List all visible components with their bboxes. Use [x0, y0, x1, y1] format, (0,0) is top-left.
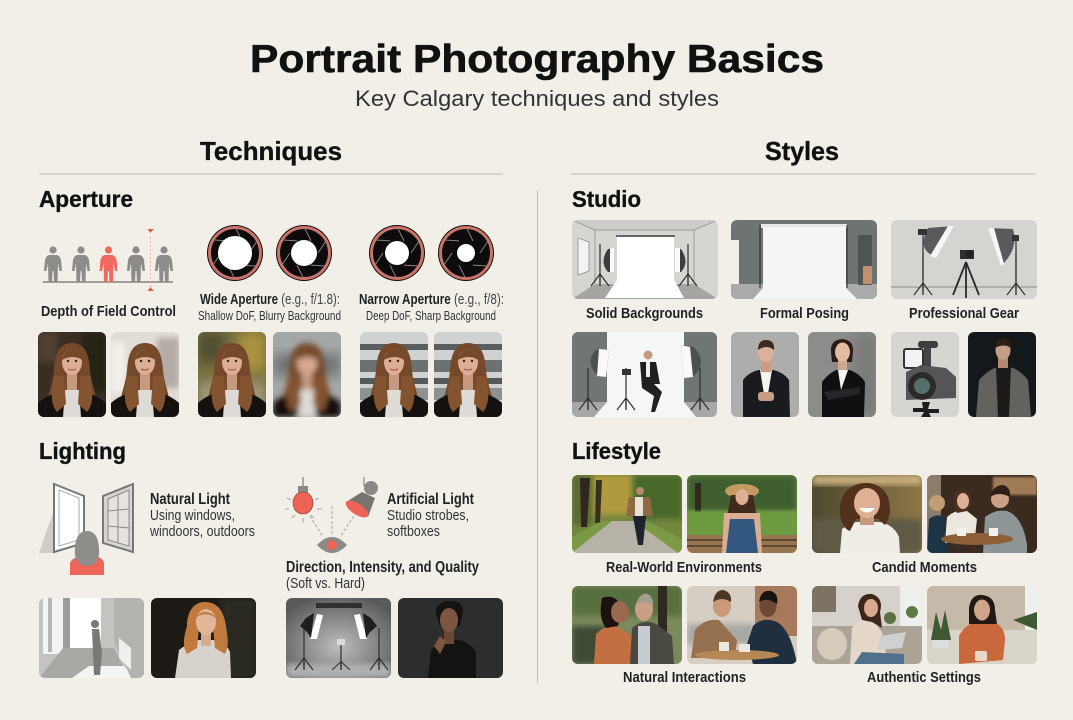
heading: lifestyle: Lifestyle — [572, 438, 661, 464]
photo: woman with laptop on sofa — [812, 586, 922, 664]
title: Portrait Photography Basics — [250, 38, 824, 81]
panel: studio — [572, 186, 1038, 417]
photo: candid smiling woman — [812, 475, 922, 553]
photo: woman on couch with mug — [927, 586, 1037, 664]
photo: two men at cafe — [687, 586, 797, 664]
label: narrow aperture: Narrow Aperture (e.g., f/8): — [359, 292, 504, 308]
photo: couple in park — [572, 586, 682, 664]
illustration: solid backgrounds — [572, 220, 718, 299]
photo: narrow aperture building background 2 — [434, 332, 502, 417]
photo: portrait dark background — [38, 332, 106, 417]
icon: bulb, lamp and eye — [285, 477, 378, 553]
heading: aperture: Aperture — [39, 186, 133, 212]
photo: businessman — [731, 332, 801, 417]
photo: narrow aperture building background 1 — [360, 332, 428, 417]
label: direction, intensity and quality: Direction, Intensity, and Quality — [286, 559, 479, 576]
icon: wide aperture 1 — [207, 225, 263, 281]
photo: portrait light background — [111, 332, 179, 417]
label: professional gear: Professional Gear — [909, 305, 1019, 322]
photo: walking in park — [572, 475, 682, 553]
label: wide aperture: Wide Aperture (e.g., f/1.8): — [200, 292, 340, 308]
label: artificial light: Artificial Light — [387, 491, 474, 508]
photo: wide aperture sharp subject — [198, 332, 266, 417]
icon: narrow aperture 1 — [369, 225, 425, 281]
icon: depth of field figures — [43, 229, 173, 291]
icon: window with person — [39, 484, 133, 575]
label: candid moments: Candid Moments — [872, 559, 977, 576]
icon: wide aperture 2 — [276, 225, 332, 281]
label: natural interactions: Natural Interactions — [623, 669, 746, 686]
text: natural light description: windoors, outdoors — [149, 524, 255, 540]
label: natural light: Natural Light — [150, 491, 230, 508]
label: authentic settings: Authentic Settings — [867, 669, 981, 686]
photo: woman on bench with hat — [687, 475, 797, 553]
text: artificial light description: Studio strobes, — [387, 508, 469, 524]
photo: wide aperture blurred subject — [273, 332, 341, 417]
photo: woman with auburn hair, dark — [151, 598, 256, 678]
heading: studio: Studio — [572, 186, 641, 212]
label: depth of field control: Depth of Field Control — [41, 303, 176, 320]
column heading: styles: Styles — [765, 136, 839, 166]
label: real-world environments: Real-World Environments — [606, 559, 762, 576]
text: natural light description — [149, 508, 255, 540]
photo: friends in cafe — [927, 475, 1037, 553]
illustration: professional gear — [891, 220, 1037, 299]
illustration: camera with light — [891, 332, 961, 417]
panel: lighting — [39, 438, 503, 678]
illustration: seated subject in studio — [572, 332, 717, 417]
text: artificial light description: softboxes — [387, 524, 440, 540]
text: soft vs hard: (Soft vs. Hard) — [286, 576, 365, 592]
text: artificial light description — [387, 508, 469, 540]
photo: businesswoman — [808, 332, 878, 417]
label: solid backgrounds: Solid Backgrounds — [586, 305, 703, 322]
photo: studio lighting setup — [286, 598, 391, 678]
photo: window sketch — [39, 598, 144, 678]
photo: dramatic dark portrait — [398, 598, 503, 678]
panel: lifestyle — [572, 438, 1037, 686]
text: natural light description: Using windows, — [150, 508, 235, 524]
icon: narrow aperture 2 — [438, 225, 494, 281]
photo: man in grey blazer on dark — [968, 332, 1038, 417]
label: formal posing: Formal Posing — [760, 305, 849, 322]
column heading: techniques: Techniques — [200, 136, 342, 166]
caption: wide aperture: Shallow DoF, Blurry Background — [198, 308, 341, 323]
illustration: formal posing backdrop — [731, 220, 877, 299]
heading: lighting: Lighting — [39, 438, 126, 464]
caption: narrow aperture: Deep DoF, Sharp Background — [366, 308, 496, 323]
panel: aperture — [38, 186, 504, 417]
subtitle: Key Calgary techniques and styles — [355, 86, 719, 111]
